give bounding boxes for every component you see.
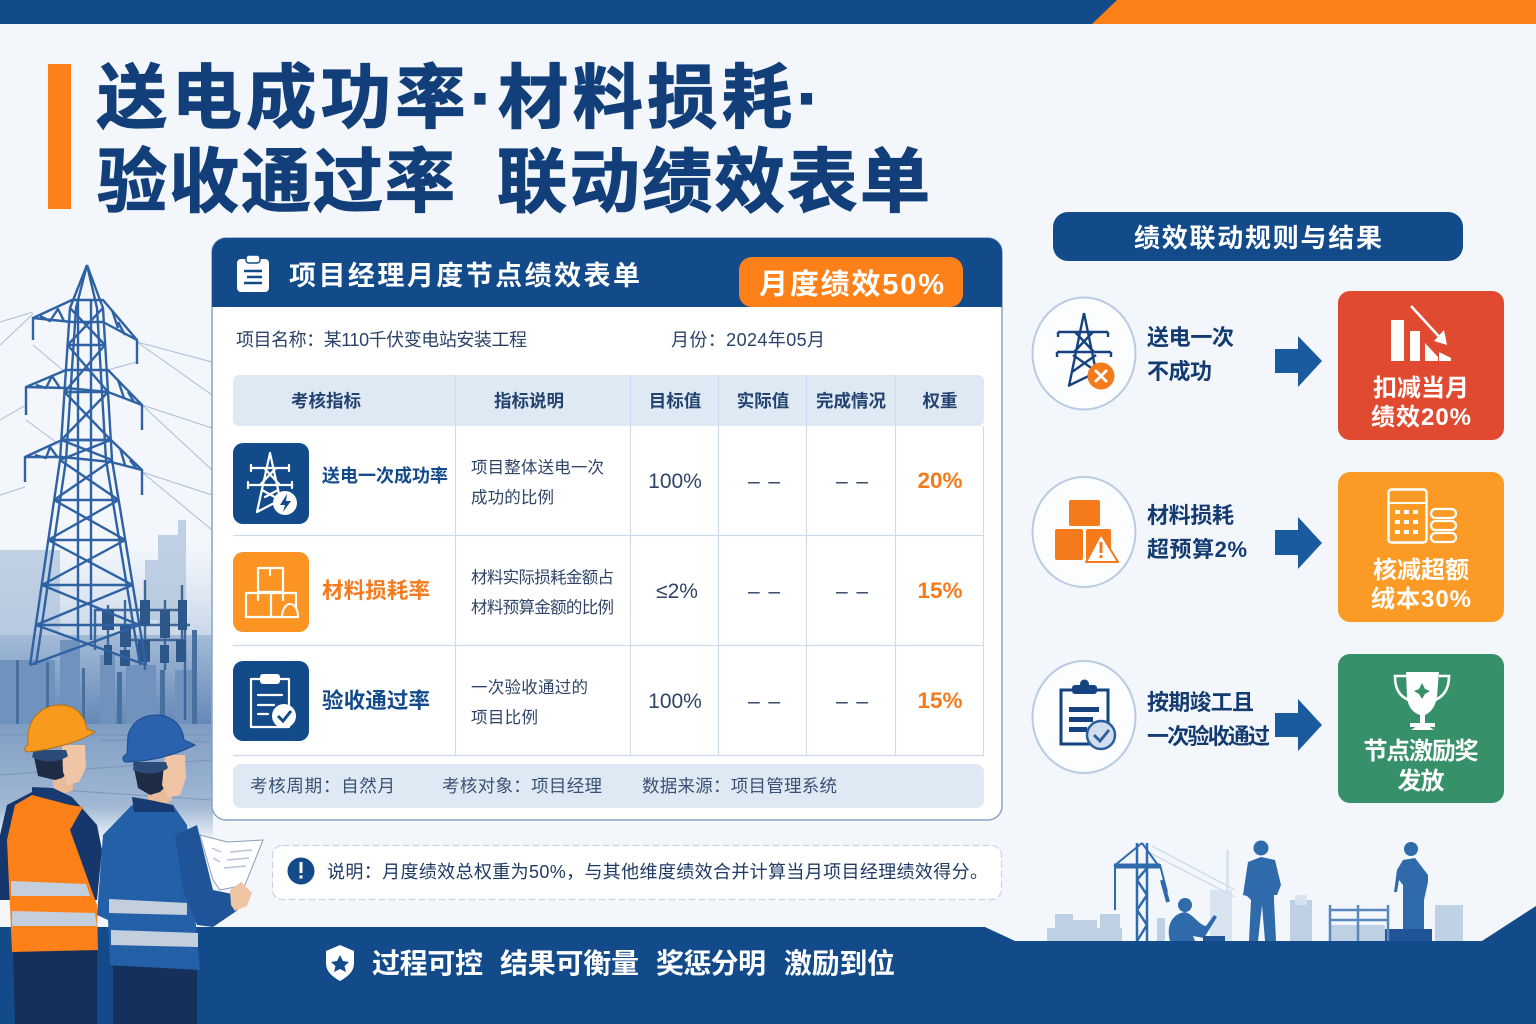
result: deduct 20% bbox=[1338, 291, 1504, 440]
row: material loss: ≤2% bbox=[656, 580, 698, 603]
icon: seated worker bbox=[1169, 898, 1225, 941]
icon: checklist bbox=[233, 661, 309, 741]
top banner bbox=[0, 0, 1536, 24]
rule: power failure bbox=[1032, 291, 1504, 440]
table bbox=[233, 375, 984, 756]
table header: 考核指标 bbox=[291, 391, 361, 411]
footer band bbox=[0, 906, 1536, 1024]
rule: on-time completion: 按期竣工且 bbox=[1147, 690, 1254, 715]
row: power success bbox=[233, 443, 963, 524]
heading: rules bbox=[1053, 212, 1463, 261]
icon: clipboard with check bbox=[1032, 661, 1136, 773]
illustration: substation background bbox=[0, 520, 213, 842]
title: 验收通过率 bbox=[97, 143, 455, 221]
slogan: 过程可控 bbox=[372, 948, 483, 979]
title bbox=[97, 59, 930, 221]
pants bbox=[113, 966, 197, 1024]
slogan: 奖惩分明 bbox=[656, 948, 766, 979]
row: material loss: – – bbox=[836, 580, 868, 603]
panel: performance form bbox=[212, 238, 1002, 820]
icon: boxes bbox=[233, 552, 309, 632]
arrow bbox=[1275, 517, 1322, 569]
title accent bar bbox=[48, 64, 71, 209]
rule: power failure: 送电一次 bbox=[1147, 325, 1234, 350]
row: power success: 20% bbox=[917, 468, 963, 493]
row: material loss: 材料预算金额的比例 bbox=[471, 598, 614, 617]
table header: 实际值 bbox=[737, 391, 789, 411]
rule: power failure: 不成功 bbox=[1147, 359, 1212, 384]
table footer: 数据来源：项目管理系统 bbox=[642, 776, 837, 796]
illustration: transmission wires bbox=[0, 312, 212, 530]
arrow bbox=[1275, 699, 1322, 751]
slogan: 结果可衡量 bbox=[500, 948, 639, 979]
note box bbox=[272, 846, 1002, 900]
title: 送电成功率·材料损耗· bbox=[97, 59, 820, 137]
document bbox=[200, 835, 263, 890]
icon: standing worker bbox=[1243, 840, 1281, 941]
table footer bbox=[233, 764, 984, 808]
heading: rules: 绩效联动规则与结果 bbox=[1134, 223, 1382, 253]
arrow bbox=[1275, 336, 1322, 387]
badge: monthly weight bbox=[739, 257, 963, 307]
icon: tower crane bbox=[1114, 843, 1168, 941]
icon: boxes with warning bbox=[1032, 477, 1136, 587]
result: incentive bonus: 节点激励奖 bbox=[1364, 738, 1478, 765]
row: power success: – – bbox=[836, 470, 868, 493]
table header: 指标说明 bbox=[494, 391, 564, 411]
slogan: 激励到位 bbox=[784, 947, 895, 979]
row: acceptance: 100% bbox=[648, 690, 702, 713]
row: material loss: 15% bbox=[917, 578, 963, 603]
table header: 完成情况 bbox=[816, 391, 886, 411]
result: incentive bonus: 发放 bbox=[1398, 768, 1444, 795]
rule: on-time completion: 一次验收通过 bbox=[1147, 724, 1270, 749]
result: deduct 20%: 绩效20% bbox=[1371, 404, 1471, 431]
row: material loss: 材料损耗率 bbox=[322, 579, 430, 603]
row: power success: 送电一次成功率 bbox=[322, 465, 448, 486]
form heading: 项目经理月度节点绩效表单 bbox=[289, 261, 640, 291]
result: cut cost 30% bbox=[1338, 472, 1504, 622]
row: power success: 项目整体送电一次 bbox=[471, 458, 604, 477]
result: deduct 20%: 扣减当月 bbox=[1373, 375, 1469, 402]
rule: material overrun: 超预算2% bbox=[1147, 537, 1247, 562]
icon: tower with cross bbox=[1032, 298, 1136, 410]
row: acceptance: 一次验收通过的 bbox=[471, 678, 588, 697]
icon: orange-vest worker bbox=[0, 705, 102, 1024]
badge: monthly weight: 月度绩效50% bbox=[759, 268, 944, 301]
rule: material overrun: 材料损耗 bbox=[1147, 503, 1234, 528]
icon: tower bbox=[233, 443, 309, 524]
rule: on-time completion bbox=[1032, 654, 1504, 803]
row: acceptance: – – bbox=[748, 690, 780, 713]
icon: blue-jacket worker bbox=[97, 715, 263, 1024]
row: power success: 100% bbox=[648, 470, 702, 493]
icon: clipboard bbox=[237, 255, 269, 292]
row: material loss bbox=[233, 552, 963, 632]
row: acceptance: 15% bbox=[917, 688, 963, 713]
rule: material overrun bbox=[1032, 472, 1504, 622]
row: acceptance bbox=[233, 661, 963, 741]
icon: shield bbox=[326, 945, 354, 981]
row: acceptance: 项目比例 bbox=[471, 708, 538, 727]
row: power success: 成功的比例 bbox=[471, 488, 554, 507]
illustration: transmission tower bbox=[25, 265, 146, 665]
row: material loss: 材料实际损耗金额占 bbox=[471, 568, 614, 587]
icon: scaffold bbox=[1329, 905, 1389, 941]
illustration: construction silhouettes bbox=[1047, 840, 1463, 942]
note box: 说明：月度绩效总权重为50%，与其他维度绩效合并计算当月项目经理绩效得分。 bbox=[327, 862, 988, 882]
pants bbox=[13, 948, 97, 1024]
table header: 目标值 bbox=[649, 391, 701, 411]
result: cut cost 30%: 绒本30% bbox=[1371, 586, 1471, 613]
project info: 月份：2024年05月 bbox=[671, 330, 825, 350]
title: 联动绩效表单 bbox=[497, 143, 930, 221]
project info bbox=[236, 330, 825, 350]
panel header bbox=[212, 238, 1002, 307]
result: incentive bonus bbox=[1338, 654, 1504, 803]
icon: gesturing worker bbox=[1385, 842, 1432, 941]
icon: info bbox=[288, 858, 314, 884]
result: cut cost 30%: 核减超额 bbox=[1373, 557, 1469, 584]
project info: 项目名称：某110千伏变电站安装工程 bbox=[236, 330, 527, 350]
row: acceptance: 验收通过率 bbox=[322, 688, 430, 713]
slogan bbox=[372, 947, 895, 979]
row: material loss: – – bbox=[748, 580, 780, 603]
row: acceptance: – – bbox=[836, 690, 868, 713]
row: power success: – – bbox=[748, 470, 780, 493]
table footer: 考核对象：项目经理 bbox=[442, 776, 602, 796]
table header bbox=[233, 375, 984, 426]
table header: 权重 bbox=[922, 391, 958, 411]
table footer: 考核周期：自然月 bbox=[250, 776, 395, 796]
